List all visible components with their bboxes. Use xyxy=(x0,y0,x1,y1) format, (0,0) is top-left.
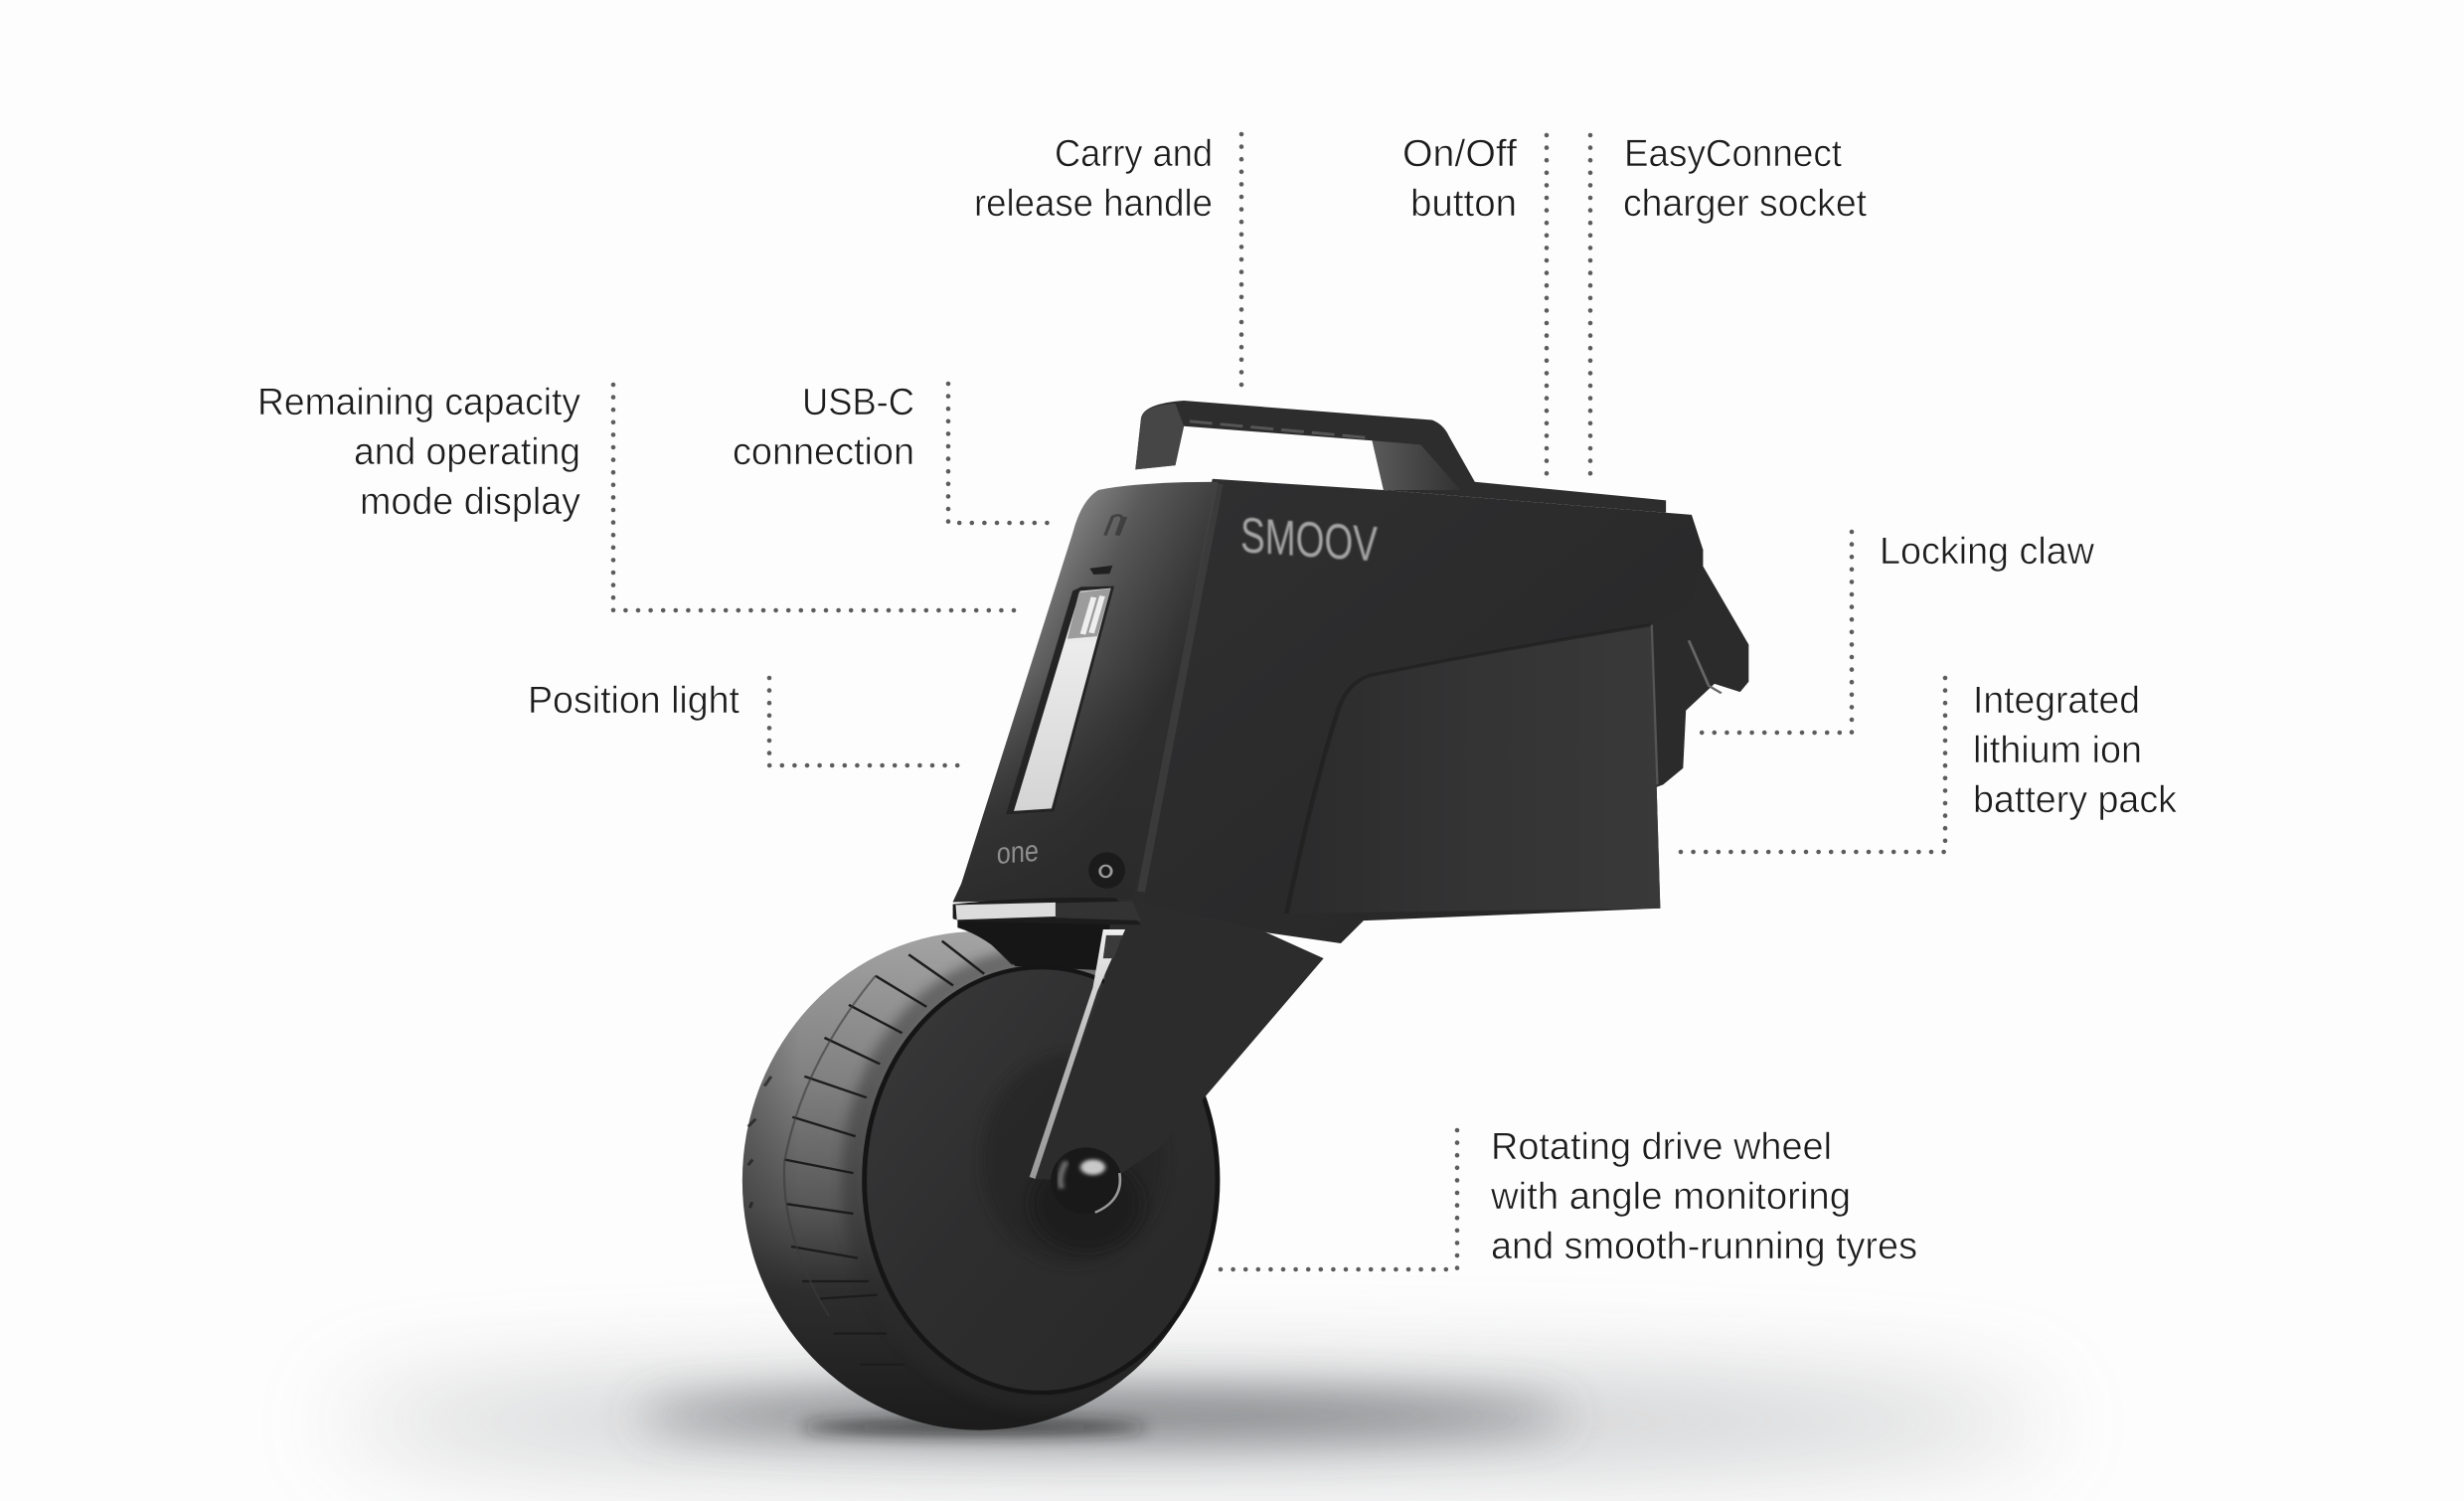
collar xyxy=(953,898,1141,924)
callout: integrated battery pack xyxy=(1679,678,2178,852)
hub centre xyxy=(982,1053,1164,1265)
fork strip shadow xyxy=(1103,935,1122,958)
label: and operating xyxy=(354,431,580,473)
label: mode display xyxy=(360,481,580,523)
callout: locking claw xyxy=(1700,531,2095,733)
leader xyxy=(1215,1130,1457,1269)
label xyxy=(733,382,914,473)
fork arm xyxy=(1033,895,1324,1181)
display bezel xyxy=(1006,586,1114,814)
tread lines xyxy=(748,931,1013,1365)
callout: easyconnect charger socket xyxy=(1590,133,1867,475)
leader xyxy=(1545,135,1549,475)
ground shadow xyxy=(338,1384,2048,1459)
label xyxy=(974,133,1213,225)
slot xyxy=(1089,566,1112,575)
handle grip xyxy=(1135,404,1184,469)
label: release handle xyxy=(974,183,1213,225)
leader xyxy=(948,384,1054,523)
handle strut xyxy=(1372,440,1460,490)
label: USB-C xyxy=(802,382,914,423)
hub dark core xyxy=(1031,1158,1142,1251)
axle knob xyxy=(1051,1147,1122,1214)
front face xyxy=(953,482,1219,903)
leader xyxy=(1679,678,1945,852)
label: button xyxy=(1410,183,1517,225)
callout: rotating drive wheel xyxy=(1215,1126,1917,1269)
callout: position light xyxy=(528,678,962,765)
battery edge highlight xyxy=(1652,625,1658,784)
label: Locking claw xyxy=(1880,531,2095,573)
tyre edge shading xyxy=(742,931,1218,1430)
shadow under collar xyxy=(957,917,1126,970)
callout: USB-C connection xyxy=(733,382,1054,523)
on/off button xyxy=(1088,852,1125,889)
SMOOV logo: SMOOV xyxy=(1240,507,1378,573)
label xyxy=(257,382,580,523)
main body xyxy=(953,401,1748,943)
label xyxy=(1973,680,2178,821)
label: with angle monitoring xyxy=(1490,1176,1851,1218)
battery crease xyxy=(1286,625,1652,914)
USB-C icon xyxy=(1105,515,1126,536)
tyre xyxy=(742,931,1218,1430)
display mode bars xyxy=(1082,596,1102,634)
leader xyxy=(1239,134,1243,387)
label: lithium ion xyxy=(1973,730,2142,771)
label: charger socket xyxy=(1623,183,1867,225)
label xyxy=(1402,133,1517,225)
label: and smooth-running tyres xyxy=(1491,1226,1917,1267)
model label: one xyxy=(997,833,1039,871)
label: On/Off xyxy=(1402,133,1517,175)
label xyxy=(1490,1126,1917,1267)
leader xyxy=(1588,135,1592,475)
infographic: SMOOV one drive unit xyxy=(260,131,2177,1501)
carry handle xyxy=(1135,401,1666,513)
claw detail xyxy=(1689,640,1722,693)
label: connection xyxy=(733,431,914,473)
fork silver strip xyxy=(1030,929,1125,1179)
label: Integrated xyxy=(1973,680,2140,722)
collar dark section xyxy=(1056,902,1141,920)
battery pack panel xyxy=(1286,625,1660,914)
drive wheel xyxy=(742,895,1324,1430)
callout: carry and release handle xyxy=(974,133,1241,387)
label: battery pack xyxy=(1973,779,2178,821)
housing side xyxy=(1115,479,1703,943)
callout: remaining capacity display xyxy=(257,382,1024,610)
locking claw xyxy=(1629,521,1748,791)
handle underside texture xyxy=(1190,421,1367,437)
label: Rotating drive wheel xyxy=(1491,1126,1832,1168)
ridge highlight xyxy=(1141,484,1220,892)
label: Remaining capacity xyxy=(257,382,580,423)
collar silver strip xyxy=(955,903,1056,919)
label: EasyConnect xyxy=(1624,133,1842,175)
label: Carry and xyxy=(1055,133,1213,175)
display mode segment xyxy=(1068,588,1111,639)
tread band shading xyxy=(855,959,1228,1401)
display window xyxy=(1014,588,1111,811)
leader xyxy=(769,678,962,765)
label: Position light xyxy=(528,680,739,722)
wheel disc xyxy=(865,967,1218,1393)
label xyxy=(1623,133,1867,225)
leader xyxy=(613,385,1024,610)
callout: on/off button xyxy=(1402,133,1547,475)
leader xyxy=(1700,532,1852,733)
